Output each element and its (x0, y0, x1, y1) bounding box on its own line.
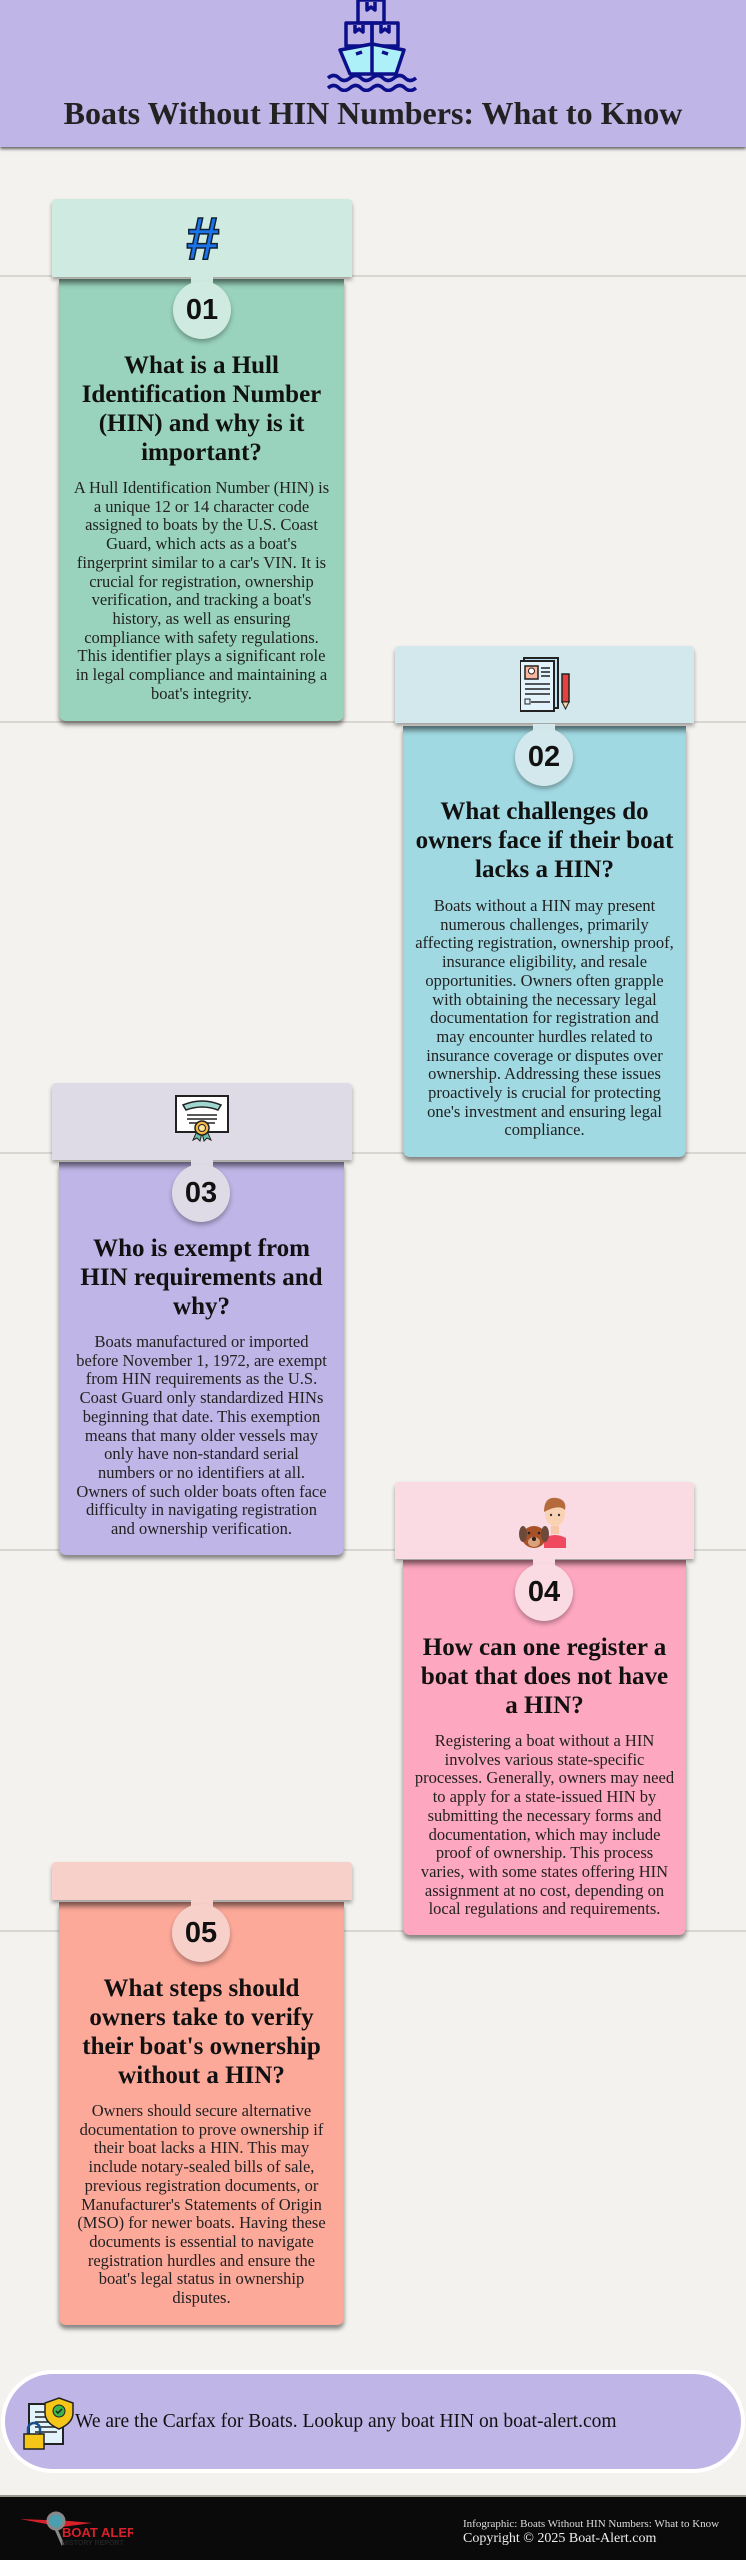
text block: varies, with some states offering HIN (421, 1862, 668, 1881)
heading: their boat's ownership (82, 2033, 321, 2060)
text block: numerous challenges, primarily (440, 915, 649, 934)
text: callout message: We are the Carfax for Boats. Lookup any boat HIN on boat-alert.com (75, 2411, 617, 2432)
text block (77, 2101, 326, 2307)
text block: documentation to prove ownership if (80, 2120, 323, 2139)
heading (82, 1975, 321, 2089)
text block: disputes. (172, 2288, 231, 2307)
number badge: 04 (528, 1576, 560, 1608)
text block: include notary-sealed bills of sale, (89, 2157, 314, 2176)
text block: boat's integrity. (151, 684, 252, 703)
text block: crucial for registration, ownership (89, 572, 314, 591)
panel: card 01 (49, 199, 355, 728)
text block: from HIN requirements as the U.S. (86, 1369, 317, 1388)
text block: boat's legal status in ownership (99, 2269, 304, 2288)
text block: Boats without a HIN may present (434, 896, 655, 915)
heading: why? (173, 1293, 230, 1320)
panel: card 02 (392, 646, 697, 1164)
heading: boat that does not have (421, 1663, 668, 1690)
text block: fingerprint similar to a car's VIN. It is (77, 553, 326, 572)
heading: without a HIN? (118, 2062, 285, 2089)
text block: Boats manufactured or imported (94, 1332, 308, 1351)
number badge: 02 (528, 741, 560, 773)
text block (415, 1731, 674, 1918)
text block: Manufacturer's Statements of Origin (81, 2195, 322, 2214)
text block: one's investment and ensuring legal (427, 1102, 662, 1121)
text block: affecting registration, ownership proof, (415, 933, 674, 952)
text block (74, 478, 329, 703)
text block: Registering a boat without a HIN (435, 1731, 654, 1750)
heading: owners take to verify (89, 2004, 314, 2031)
number badge (515, 728, 573, 786)
icon: person with dog (519, 1498, 566, 1548)
number badge (172, 1904, 230, 1962)
number badge (515, 1563, 573, 1621)
text block: Guard, which acts as a boat's (106, 534, 297, 553)
text block: involves various state-specific (445, 1750, 644, 1769)
heading: How can one register a (423, 1634, 666, 1661)
text block: assignment at no cost, depending on (425, 1881, 664, 1900)
callout: carfax banner (1, 2370, 745, 2473)
footer text: Infographic: Boats Without HIN Numbers: What to Know (463, 2518, 719, 2530)
text block: their boat lacks a HIN. This may (94, 2138, 309, 2157)
heading (421, 1634, 668, 1719)
icon: document with pencil (520, 657, 570, 712)
heading (82, 352, 321, 466)
heading: HIN requirements and (80, 1264, 323, 1291)
text block: insurance eligibility, and resale (442, 952, 647, 971)
number badge: 05 (185, 1917, 217, 1949)
text block: previous registration documents, or (85, 2176, 318, 2195)
text block: This identifier plays a significant role (78, 646, 325, 665)
text block: means that many older vessels may (85, 1426, 318, 1445)
text block: in legal compliance and maintaining a (76, 665, 327, 684)
text block: before November 1, 1972, are exempt (76, 1351, 327, 1370)
text block: may encounter hurdles related to (436, 1027, 653, 1046)
panel: card 03 (49, 1083, 355, 1562)
text block: documentation for registration and (430, 1008, 659, 1027)
heading: What steps should (104, 1975, 299, 2002)
text block: with obtaining the necessary legal (432, 990, 657, 1009)
text block: verification, and tracking a boat's (92, 590, 311, 609)
icon: secure document (23, 2397, 74, 2450)
logo: boat alert (20, 2512, 133, 2547)
text block: submitting the necessary forms and (428, 1806, 661, 1825)
heading: Who is exempt from (93, 1235, 310, 1262)
number badge (173, 281, 231, 339)
text block: local regulations and requirements. (429, 1899, 660, 1918)
text block: difficulty in navigating registration (86, 1500, 317, 1519)
text block: numbers or no identifiers at all. (98, 1463, 305, 1482)
text block: opportunities. Owners often grapple (425, 971, 664, 990)
heading: important? (141, 439, 262, 466)
text block: compliance. (504, 1120, 585, 1139)
number badge: 03 (185, 1177, 217, 1209)
text block (415, 896, 674, 1139)
heading: What is a Hull (124, 352, 279, 379)
text block: registration hurdles and ensure the (88, 2251, 315, 2270)
text block: Coast Guard only standardized HINs (80, 1388, 323, 1407)
heading: What challenges do (440, 798, 649, 825)
panel: card 04 (392, 1482, 697, 1942)
text block: only have non-standard serial (104, 1444, 299, 1463)
text block: a unique 12 or 14 character code (94, 497, 309, 516)
text block: compliance with safety regulations. (84, 628, 319, 647)
title: Boats Without HIN Numbers: What to Know (64, 95, 682, 131)
text block: Owners of such older boats often face (76, 1482, 327, 1501)
heading: lacks a HIN? (475, 856, 614, 883)
heading (80, 1235, 323, 1320)
heading (416, 798, 674, 883)
text block: documents is essential to navigate (89, 2232, 314, 2251)
text block: proof of ownership. This process (436, 1843, 653, 1862)
heading: a HIN? (505, 1692, 584, 1719)
header banner (0, 0, 746, 147)
heading: Identification Number (82, 381, 321, 408)
text block: documentation, which may include (429, 1825, 660, 1844)
text block: (MSO) for newer boats. Having these (77, 2213, 326, 2232)
icon: certificate (175, 1095, 229, 1142)
heading: owners face if their boat (416, 827, 673, 854)
number badge: 01 (186, 294, 218, 326)
icon: ship (326, 0, 418, 92)
text block: ownership. Addressing these issues (428, 1064, 661, 1083)
footer: Copyright © 2025 Boat-Alert.com (463, 2531, 656, 2546)
panel: card 05 (49, 1862, 355, 2332)
text block: processes. Generally, owners may need (415, 1768, 674, 1787)
text block: insurance coverage or disputes over (426, 1046, 663, 1065)
text block: beginning that date. This exemption (83, 1407, 320, 1426)
footer (0, 2495, 746, 2560)
text block: history, as well as ensuring (112, 609, 291, 628)
text block: and ownership verification. (111, 1519, 292, 1538)
text block: A Hull Identification Number (HIN) is (74, 478, 329, 497)
text block: assigned to boats by the U.S. Coast (85, 515, 318, 534)
heading: (HIN) and why is it (99, 410, 304, 437)
logo: boat alert: HISTORY REPORT (62, 2540, 124, 2547)
text block (76, 1332, 327, 1538)
text block: Owners should secure alternative (92, 2101, 311, 2120)
number badge (172, 1164, 230, 1222)
text block: proactively is crucial for protecting (428, 1083, 661, 1102)
text block: to apply for a state-issued HIN by (433, 1787, 656, 1806)
